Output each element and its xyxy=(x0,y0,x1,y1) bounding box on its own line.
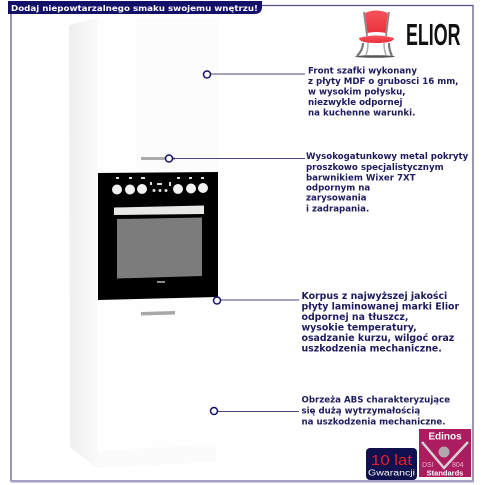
callout text 3: wysokie temperatury, xyxy=(302,322,417,334)
callout text 1: w wysokim połysku, xyxy=(308,88,406,98)
badge: 10 years warranty: Gwarancji xyxy=(368,468,415,478)
badge: 10 years warranty: 10 lat xyxy=(371,452,413,469)
lower door handle xyxy=(141,311,175,316)
callout text 2: Wysokogatunkowy metal pokryty xyxy=(306,152,469,162)
oven knobs xyxy=(112,183,208,194)
callout text 1: z płyty MDF o grubosci 16 mm, xyxy=(308,77,458,87)
frame bottom edge xyxy=(11,480,474,482)
callout 3: body xyxy=(214,291,459,354)
callout text 3: Korpus z najwyższej jakości xyxy=(302,291,447,302)
pointer 1 xyxy=(211,73,305,75)
upper door handle xyxy=(141,157,175,160)
marker 1 xyxy=(204,71,210,78)
callout text 1: Front szafki wykonany xyxy=(308,66,417,76)
marker 4 xyxy=(210,408,218,414)
callout text 1: niezwykle odpornej xyxy=(308,98,403,108)
marker 3 xyxy=(214,297,220,304)
oven brand xyxy=(157,281,165,283)
badge: 10 years warranty xyxy=(366,448,417,480)
badge: Edinos standards: 804 xyxy=(452,462,464,469)
badge: Edinos standards: Standards xyxy=(427,468,463,478)
callout text 4: na uszkodzenia mechaniczne. xyxy=(302,418,446,428)
logo: Elior xyxy=(355,10,460,58)
pointer 3 xyxy=(221,299,299,301)
callout text 2: zarysowania xyxy=(306,194,367,204)
callout text 3: płyty laminowanej marki Elior xyxy=(302,302,459,312)
kitchen cabinet xyxy=(69,18,219,468)
pointer 2 xyxy=(173,158,305,160)
oven handle xyxy=(114,206,204,215)
callout 1: front xyxy=(204,66,458,118)
badge: Edinos standards: Edinos xyxy=(428,432,462,442)
icon: red chair xyxy=(355,10,395,58)
callout text 2: i zadrapania. xyxy=(306,204,369,214)
oven window xyxy=(117,218,202,278)
oven xyxy=(98,172,218,300)
cabinet lower door xyxy=(98,297,218,450)
callout text 3: osadzanie kurzu, wilgoć oraz xyxy=(302,333,455,344)
callout 4: edges xyxy=(210,396,450,428)
callout text 4: się dużą wytrzymałością xyxy=(302,406,420,416)
cabinet plinth xyxy=(97,444,216,468)
badge: Edinos standards xyxy=(419,429,471,478)
callout text 4: Obrzeża ABS charakteryzujące xyxy=(302,396,450,406)
callout text 2: proszkowo specjalistycznym xyxy=(306,163,444,173)
callout text 1: na kuchenne warunki. xyxy=(308,108,415,118)
callout text 3: uszkodzenia mechaniczne. xyxy=(302,344,442,354)
callout text 3: odpornej na tłuszcz, xyxy=(302,312,408,323)
marker 2 xyxy=(166,155,172,162)
banner heading: Dodaj niepowtarzalnego smaku swojemu wnętrzu! xyxy=(11,3,258,13)
callout text 2: odpornym na xyxy=(306,184,370,194)
cabinet side panel xyxy=(69,18,97,468)
cabinet front xyxy=(97,18,219,174)
oven controls xyxy=(116,177,204,192)
callout 2: metal xyxy=(166,152,469,214)
badge: Edinos standards: DSI xyxy=(422,462,434,469)
pointer 4 xyxy=(218,410,299,412)
callout text 2: barwnikiem Wixer 7XT xyxy=(306,174,416,184)
